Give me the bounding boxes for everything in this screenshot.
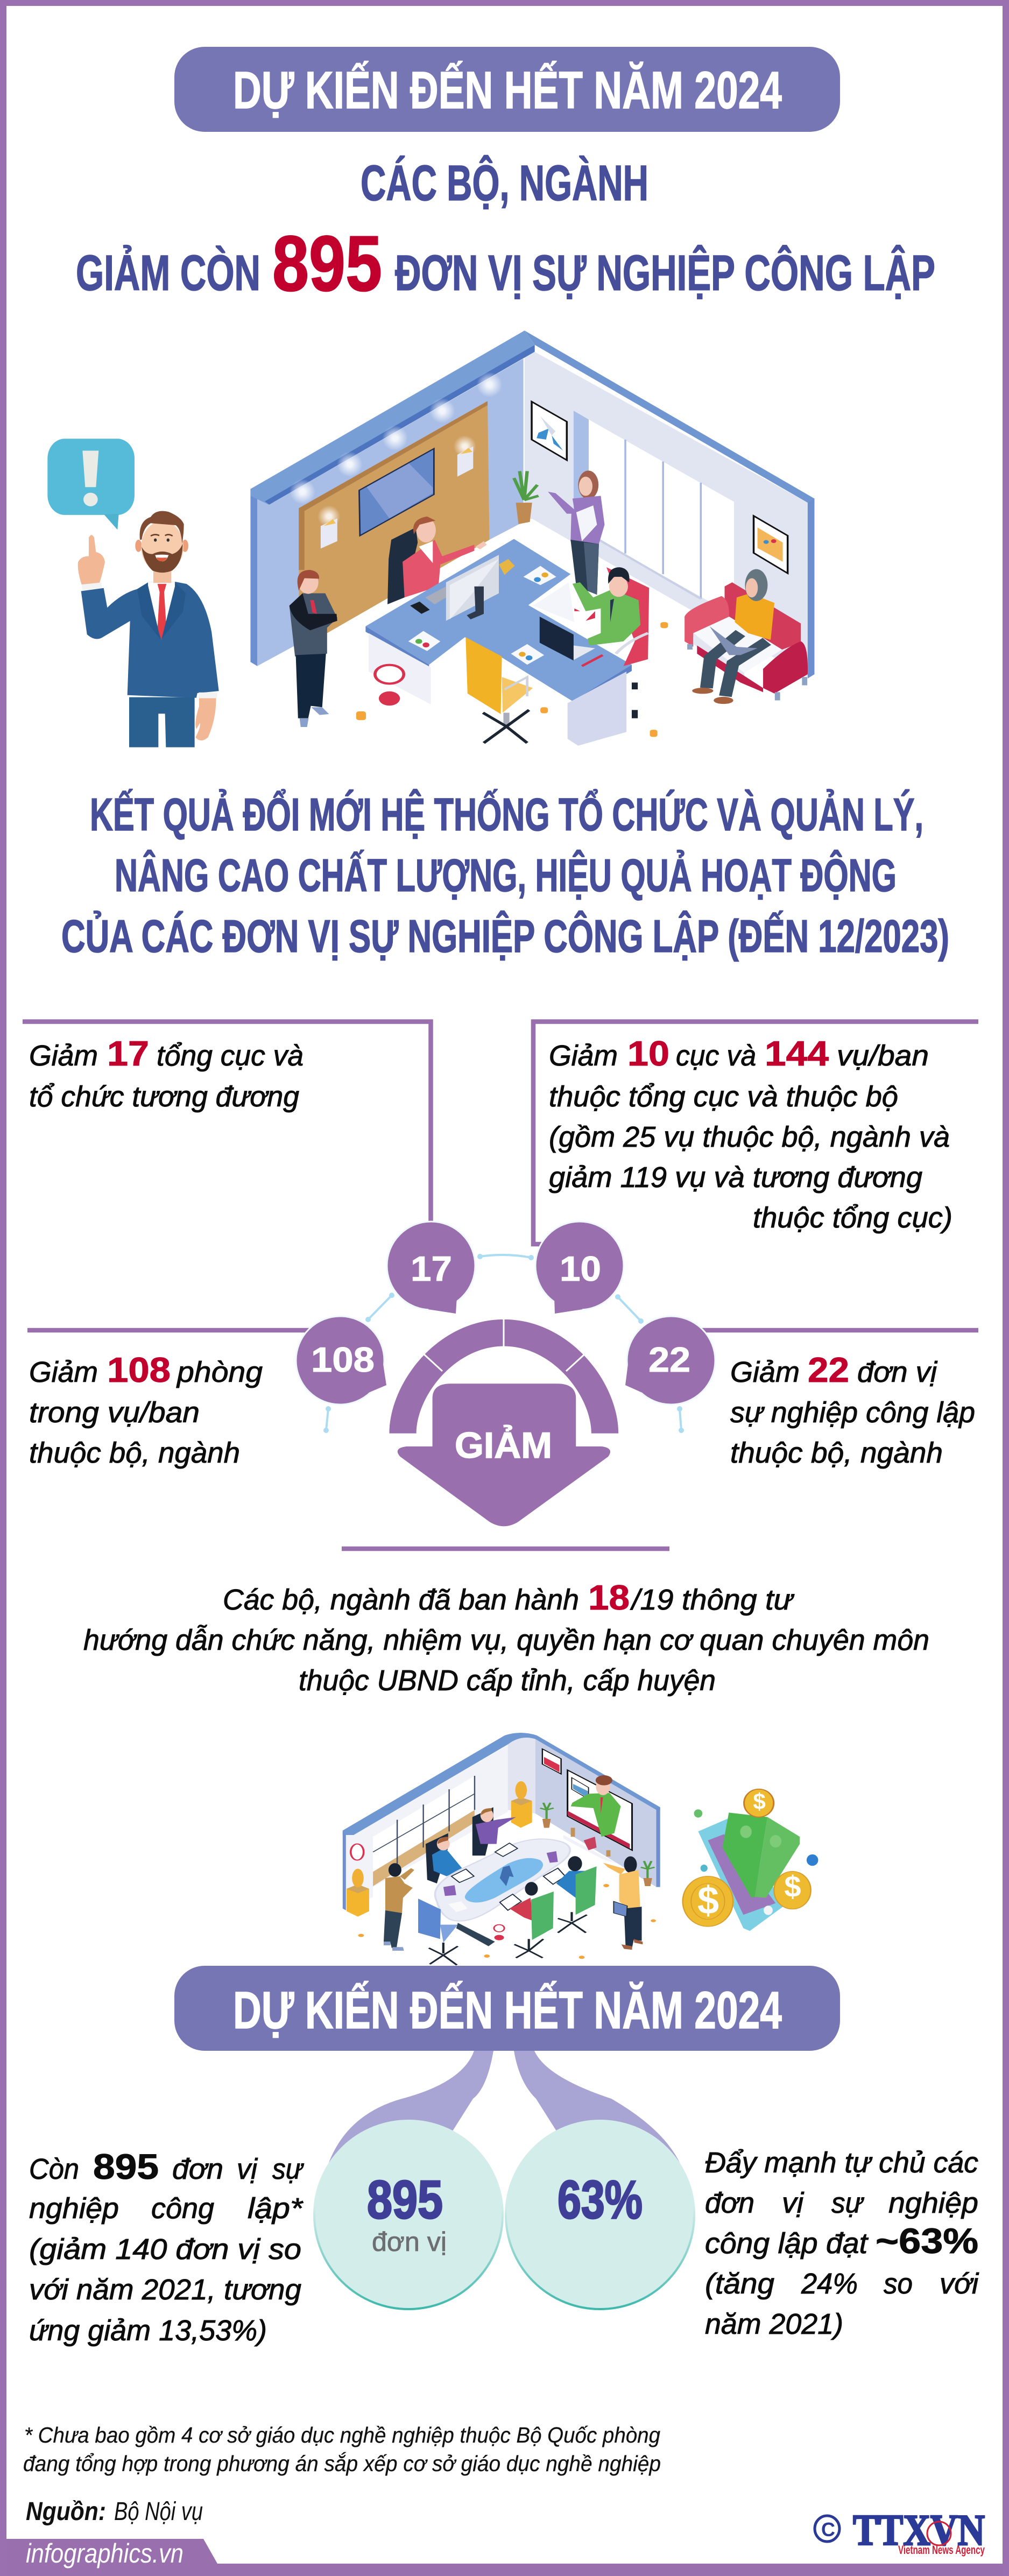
- text block: 895 units remaining: [29, 2147, 304, 2347]
- text block: circulars: /19 thông tư: [630, 1584, 795, 1616]
- circle: 895 units: [314, 2121, 503, 2309]
- logo: TTXVN: C: [821, 2518, 835, 2540]
- text block: autonomy 63 percent: Đẩy mạnh tự chủ các: [705, 2147, 978, 2179]
- panel: reduced 108: Giảm: [29, 1356, 98, 1388]
- banner: bottom: [174, 1966, 840, 2051]
- panel: reduced 17: 17: [107, 1034, 149, 1073]
- text block: autonomy 63 percent: so: [884, 2268, 913, 2300]
- illustration: office room: [250, 330, 814, 746]
- bubble: 108: [296, 1316, 386, 1405]
- text block: circulars: hướng dẫn chức năng, nhiệm vụ, quyền hạn cơ quan chuyên môn: [83, 1624, 929, 1656]
- panel: reduced 22: [701, 1330, 978, 1469]
- text block: 895 units remaining: với năm 2021, tương: [29, 2274, 301, 2306]
- text block: autonomy 63 percent: [705, 2147, 979, 2340]
- title: 895: [272, 220, 382, 307]
- text block: circulars: 18: [588, 1578, 630, 1617]
- panel: reduced 108: 108: [107, 1350, 171, 1389]
- panel: reduced 10 and 144: giảm 119 vụ và tương đương: [549, 1161, 922, 1194]
- panel: reduced 10 and 144: 10: [627, 1034, 669, 1073]
- panel: reduced 17: tổ chức tương đương: [29, 1081, 299, 1113]
- panel: reduced 22: 22: [808, 1350, 849, 1389]
- bubble: 22: [625, 1316, 715, 1405]
- panel: reduced 108: phòng: [176, 1356, 263, 1388]
- panel: reduced 22: thuộc bộ, ngành: [730, 1437, 943, 1469]
- circle: 895 units: đơn vị: [372, 2227, 447, 2257]
- text block: 895 units remaining: 895: [93, 2147, 159, 2186]
- logo: TTXVN: [815, 2506, 985, 2557]
- footer tab: website: [6, 2538, 1003, 2576]
- text block: 895 units remaining: lập*: [248, 2192, 304, 2225]
- panel: reduced 10 and 144: Giảm: [549, 1040, 618, 1072]
- circle: 63 percent: 63%: [558, 2170, 643, 2230]
- panel: reduced 22: sự nghiệp công lập: [730, 1396, 975, 1429]
- circle: 63 percent: [506, 2121, 694, 2309]
- text block: autonomy 63 percent: với: [940, 2268, 979, 2300]
- text block: autonomy 63 percent: năm 2021): [705, 2308, 843, 2340]
- source: Bộ Nội vụ: [114, 2497, 203, 2526]
- panel: reduced 17: Giảm: [29, 1040, 98, 1072]
- panel: reduced 10 and 144: (gồm 25 vụ thuộc bộ, ngành và: [549, 1121, 950, 1153]
- footnote: đang tổng hợp trong phương án sắp xếp cơ sở giáo dục nghề nghiệp: [23, 2451, 661, 2476]
- text block: 895 units remaining: công: [151, 2192, 214, 2225]
- bubble: 108: 108: [311, 1340, 375, 1379]
- panel: reduced 108: thuộc bộ, ngành: [29, 1437, 240, 1469]
- banner: top: DỰ KIẾN ĐẾN HẾT NĂM 2024: [233, 61, 782, 119]
- drips from banner: [327, 2051, 682, 2169]
- icon: dollar signs on coins: [697, 1789, 801, 1922]
- footnote: [23, 2423, 661, 2476]
- text block: 895 units remaining: Còn: [29, 2153, 79, 2185]
- icon: gauge arch with down arrow: GIẢM: [455, 1424, 552, 1466]
- bubble: 10: 10: [560, 1249, 601, 1288]
- title: GIẢM CÒN: [76, 245, 260, 301]
- text block: autonomy 63 percent: ~63%: [876, 2221, 978, 2261]
- panel: reduced 108: [27, 1330, 309, 1469]
- heading: results: [61, 789, 949, 962]
- panel: reduced 10 and 144: thuộc tổng cục và thuộc bộ: [549, 1081, 898, 1113]
- title: [76, 155, 935, 307]
- text block: 895 units remaining: sự: [272, 2153, 304, 2185]
- source: [26, 2497, 203, 2526]
- panel: reduced 22: Giảm: [730, 1356, 800, 1388]
- text block: autonomy 63 percent: đơn: [705, 2187, 754, 2219]
- panel: reduced 10 and 144: [533, 1021, 978, 1244]
- bubble: 22: 22: [648, 1340, 690, 1379]
- icon: gauge arch with down arrow: [389, 1317, 618, 1526]
- text block: 895 units remaining: đơn: [172, 2153, 223, 2185]
- icon: dollar signs on coins: $: [753, 1789, 766, 1814]
- panel: reduced 10 and 144: vụ/ban: [837, 1040, 929, 1072]
- logo: TTXVN: TTXVN: [853, 2506, 985, 2554]
- text block: autonomy 63 percent: 24%: [801, 2268, 858, 2300]
- illustration: meeting room and money: [343, 1733, 818, 1965]
- panel: reduced 10 and 144: 144: [765, 1034, 829, 1073]
- panel: reduced 17: [23, 1021, 431, 1224]
- circle: 895 units: 895: [367, 2170, 443, 2230]
- footnote: * Chưa bao gồm 4 cơ sở giáo dục nghề nghiệp thuộc Bộ Quốc phòng: [24, 2423, 660, 2447]
- text block: autonomy 63 percent: (tăng: [705, 2268, 774, 2300]
- icon: presenter with speech bubble: [47, 439, 219, 747]
- connectors between bubbles: [323, 1254, 684, 1433]
- panel: reduced 108: trong vụ/ban: [29, 1396, 200, 1429]
- banner: bottom: DỰ KIẾN ĐẾN HẾT NĂM 2024: [233, 1981, 782, 2039]
- title: CÁC BỘ, NGÀNH: [361, 155, 648, 211]
- text block: 895 units remaining: (giảm 140 đơn vị so: [29, 2233, 301, 2266]
- source: Nguồn:: [26, 2497, 106, 2526]
- banner: top: [174, 47, 840, 132]
- text block: 895 units remaining: nghiệp: [29, 2192, 119, 2225]
- text block: circulars: thuộc UBND cấp tỉnh, cấp huyện: [299, 1664, 716, 1697]
- bubble: 17: [387, 1222, 475, 1314]
- icon: dollar signs on coins: $: [784, 1869, 801, 1903]
- text block: 895 units remaining: ứng giảm 13,53%): [29, 2314, 267, 2347]
- footer tab: website: infographics.vn: [26, 2538, 184, 2568]
- text block: autonomy 63 percent: công lập đạt: [705, 2227, 869, 2260]
- text block: circulars: Các bộ, ngành đã ban hành: [223, 1584, 579, 1616]
- text block: 895 units remaining: vị: [237, 2153, 258, 2185]
- panel: reduced 10 and 144: thuộc tổng cục): [753, 1202, 952, 1234]
- text block: autonomy 63 percent: vị: [782, 2187, 805, 2219]
- text block: autonomy 63 percent: sự: [831, 2187, 865, 2219]
- icon: dollar signs on coins: $: [697, 1879, 719, 1922]
- bubble: 10: [535, 1222, 624, 1314]
- panel: reduced 17: tổng cục và: [157, 1040, 304, 1072]
- panel: reduced 22: đơn vị: [857, 1356, 938, 1388]
- bubble: 17: 17: [411, 1249, 452, 1288]
- text block: circulars: [83, 1578, 929, 1697]
- panel: reduced 10 and 144: cục và: [676, 1040, 756, 1072]
- text block: autonomy 63 percent: nghiệp: [888, 2187, 978, 2219]
